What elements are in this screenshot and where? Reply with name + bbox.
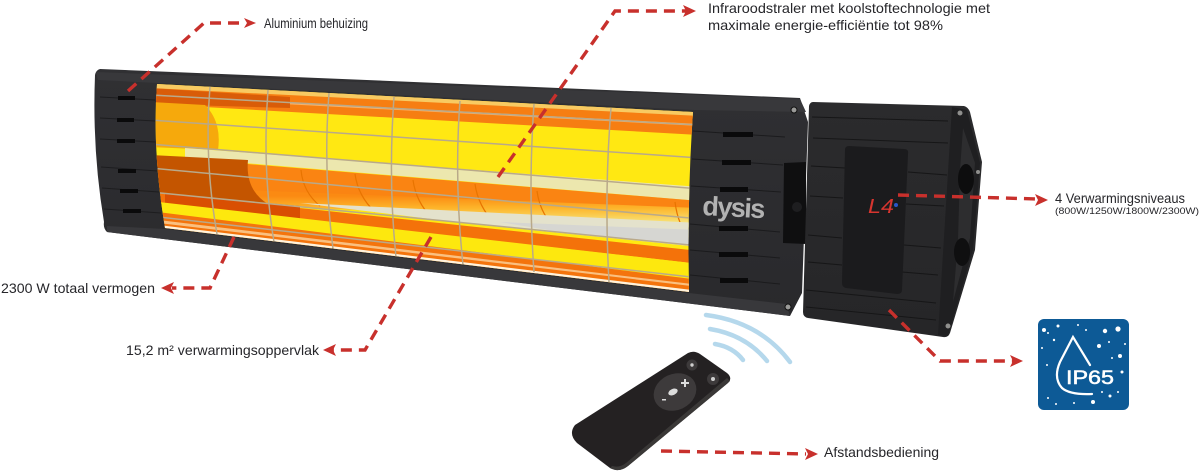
label: heating surface: 15,2 m² verwarmingsoppervlak [126, 342, 320, 358]
arrow: remote control [661, 448, 818, 460]
dark orange left zone [150, 155, 268, 204]
heater body [94, 69, 808, 316]
right end panel grooves [690, 131, 785, 284]
label: remote control: Afstandsbediening [824, 444, 939, 460]
label: carbon technology: Infraroodstraler met koolstoftechnologie met [708, 0, 990, 16]
arrow: carbon technology [498, 5, 696, 177]
left vents [117, 96, 141, 213]
snow specks [1041, 324, 1126, 405]
pale band [185, 148, 700, 201]
box grooves [806, 117, 948, 320]
remote buttons [686, 360, 698, 370]
heating window [145, 80, 705, 300]
remote body [572, 352, 730, 470]
bottom orange band [150, 211, 700, 294]
grey reflection [300, 203, 700, 247]
display reading: L4 [868, 196, 894, 218]
remote dial [647, 366, 703, 418]
brand logo: dysis [702, 191, 766, 224]
bracket [783, 162, 806, 244]
arrow: heating surface [323, 237, 431, 356]
lower orange band [150, 192, 700, 264]
label: heating levels: 4 Verwarmingsniveaus [1055, 190, 1185, 206]
label: aluminium housing: Aluminium behuizing [264, 15, 368, 31]
icon: IP65 badge [1038, 319, 1129, 410]
arrow: total power [161, 237, 234, 294]
amber left zone [150, 102, 219, 150]
label: total power: 2300 W totaal vermogen [1, 280, 155, 296]
status dot [894, 203, 898, 207]
side sockets [958, 164, 974, 194]
label: heating levels: (800W/1250W/1800W/2300W) [1055, 206, 1199, 217]
box side face [938, 107, 980, 336]
screws [785, 107, 797, 310]
heater [94, 69, 982, 337]
icon: wireless signal [706, 315, 790, 362]
arrow: IP65 [889, 310, 1023, 367]
remote control [572, 352, 730, 470]
display panel [842, 146, 908, 294]
right vents [719, 132, 753, 283]
orange band [150, 156, 700, 210]
label: carbon technology: maximale energie-efficiëntie tot 98% [708, 17, 943, 33]
control box [803, 102, 982, 337]
arrow: aluminium housing [128, 18, 256, 91]
badge label: IP65 [1066, 368, 1114, 389]
filament arcs [301, 170, 690, 238]
label: heating levels [1055, 190, 1199, 217]
heater wires [150, 86, 700, 282]
water drop outline [1057, 337, 1092, 394]
arrow: heating levels [898, 194, 1048, 206]
lower yellow band [150, 201, 700, 280]
top and bottom rails [96, 72, 806, 316]
left end panel grooves [100, 97, 161, 213]
label: carbon technology [708, 0, 990, 33]
lower light band [256, 194, 689, 228]
